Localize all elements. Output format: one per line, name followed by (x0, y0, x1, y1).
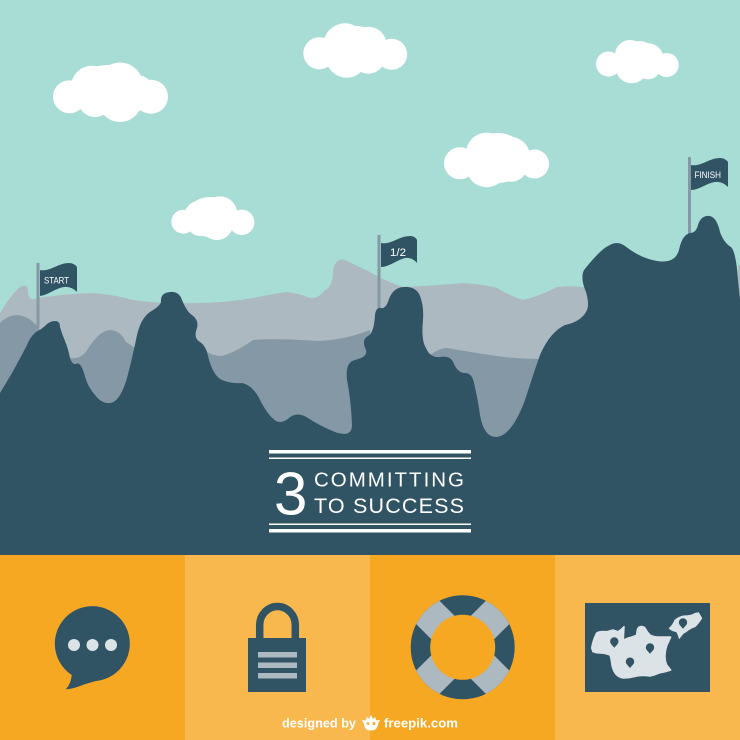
flag: finish (691, 158, 728, 190)
flag: finish: FINISH (694, 170, 721, 180)
footer credit: designed by (282, 716, 357, 730)
icon: padlock (248, 607, 306, 692)
cloud 3 (596, 40, 679, 83)
cloud 5 (171, 196, 254, 240)
cloud 2 (303, 23, 407, 78)
sky background (0, 0, 740, 560)
panel: support (370, 555, 555, 740)
cloud 4 (444, 133, 549, 187)
foreground mountain range (0, 216, 740, 560)
panel: map (555, 555, 740, 740)
flag: halfway (381, 236, 417, 267)
flag pole: halfway (378, 235, 380, 309)
title block: 3 (274, 460, 307, 528)
far mountain range (0, 259, 740, 460)
icon: life ring (410, 595, 515, 700)
cloud 1 (53, 62, 168, 122)
title block: COMMITTING (314, 468, 464, 492)
title block: TO SUCCESS (314, 494, 464, 518)
flag pole: finish (688, 157, 691, 234)
flag: halfway: 1/2 (390, 247, 406, 259)
panel: security (185, 555, 370, 740)
icon: speech bubble (55, 606, 130, 689)
panel: communication (0, 555, 185, 740)
flag: start: START (44, 276, 69, 286)
near valley shade (428, 348, 540, 450)
middle mountain range (0, 315, 375, 460)
footer credit: freepik.com (384, 716, 458, 730)
flag: start (40, 263, 77, 296)
flag pole: start (36, 263, 40, 328)
footer credit (282, 714, 458, 730)
title block (269, 450, 471, 532)
icon: freepik logo (362, 714, 380, 730)
icon: map (585, 603, 710, 692)
